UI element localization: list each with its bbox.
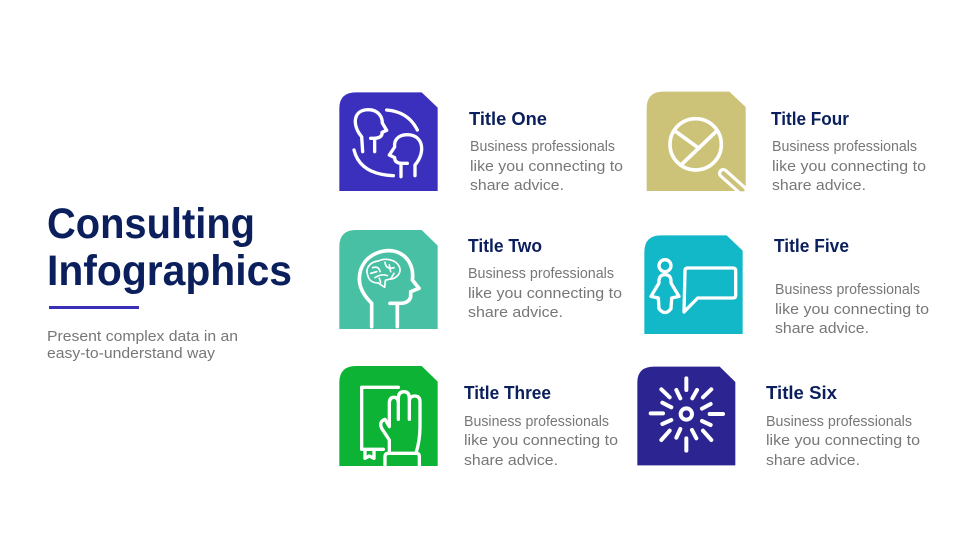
heading: Consulting Infographics: Infographics — [47, 247, 292, 295]
panel: Title Six — [637, 367, 920, 469]
subtitle: Present complex data in an — [47, 329, 238, 345]
card text: share advice. — [470, 178, 564, 194]
card text — [772, 139, 926, 194]
heading: Consulting Infographics: Consulting — [47, 200, 255, 248]
card text: share advice. — [775, 321, 869, 337]
subtitle — [47, 329, 238, 362]
card text: share advice. — [464, 453, 558, 469]
card text: like you connecting to — [775, 302, 929, 318]
card text: Business professionals — [464, 414, 609, 430]
heading underline — [49, 306, 139, 309]
panel: Title Two — [339, 230, 622, 329]
panel: Title Four — [647, 92, 926, 197]
card title: Title Six — [766, 382, 838, 403]
card text: Business professionals — [775, 282, 920, 298]
panel: Title Three — [339, 366, 618, 469]
card text: share advice. — [766, 453, 860, 469]
card title: Title Two — [468, 235, 542, 256]
card text: like you connecting to — [772, 159, 926, 175]
subtitle: easy-to-understand way — [47, 346, 216, 362]
card text — [775, 282, 929, 337]
card text — [470, 139, 623, 194]
card text: like you connecting to — [470, 159, 623, 175]
card text: like you connecting to — [464, 433, 618, 449]
panel: Title One — [339, 92, 623, 194]
heading: Consulting Infographics — [47, 200, 292, 295]
icon: hand on book — [339, 366, 438, 466]
card text: Business professionals — [468, 266, 614, 282]
icon: woman with speech bubble — [644, 235, 743, 334]
card text — [468, 266, 622, 321]
panel: Title Five — [644, 235, 929, 337]
card text: share advice. — [772, 178, 866, 194]
card title: Title One — [469, 108, 547, 129]
icon: head with brain — [339, 230, 438, 329]
card text: share advice. — [468, 305, 563, 321]
card text: like you connecting to — [468, 286, 622, 302]
card text: Business professionals — [772, 139, 917, 155]
card text: like you connecting to — [766, 433, 920, 449]
card text: Business professionals — [470, 139, 615, 155]
icon: magnifier with chart — [647, 92, 748, 197]
card title: Title Three — [464, 382, 551, 403]
card title: Title Four — [771, 108, 849, 129]
icon: sunburst — [637, 367, 735, 465]
card title: Title Five — [774, 235, 849, 256]
card text: Business professionals — [766, 414, 912, 430]
icon: two heads — [339, 92, 438, 191]
card text — [766, 414, 920, 469]
card text — [464, 414, 618, 469]
